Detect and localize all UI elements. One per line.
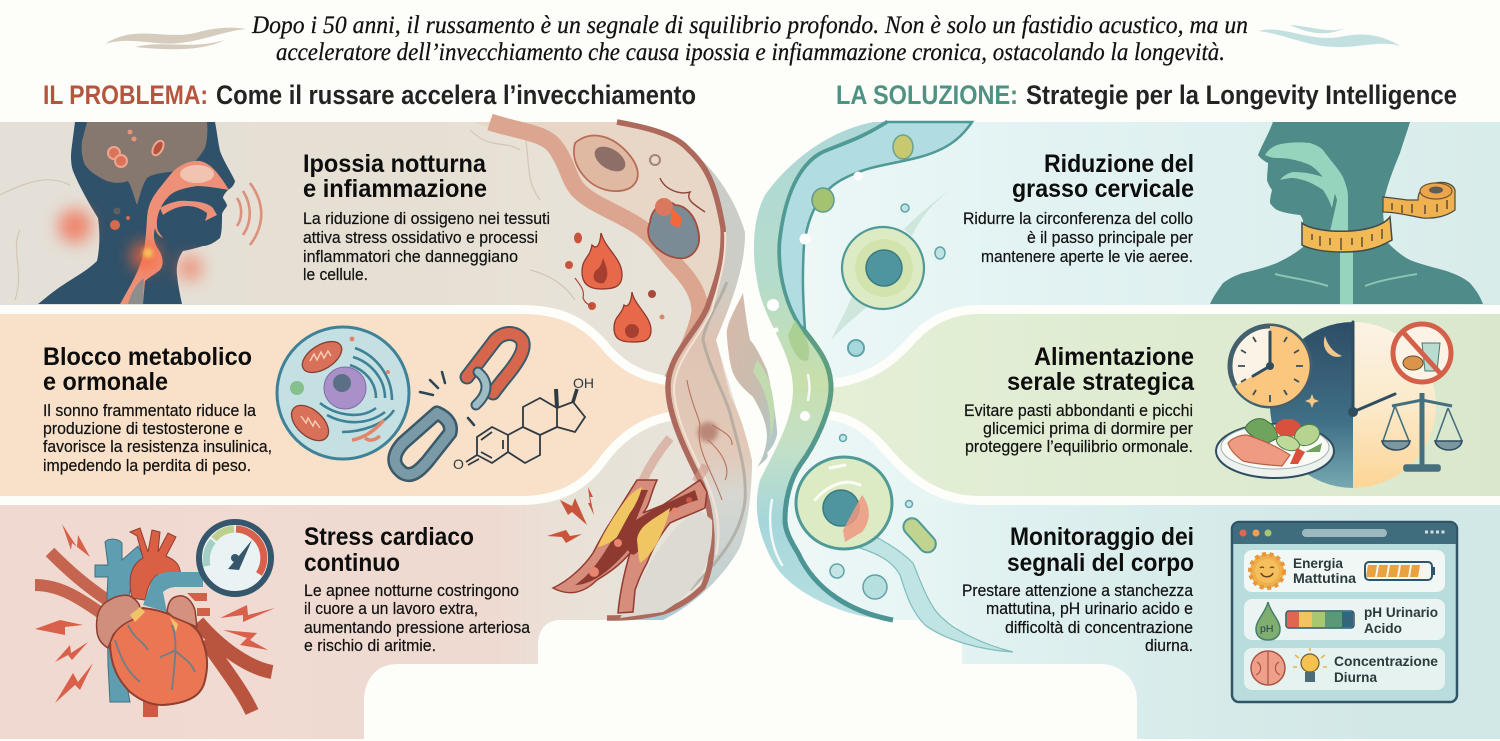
grey stripe inside rim xyxy=(690,282,745,590)
veins xyxy=(698,422,718,442)
heading: Stress cardiaco xyxy=(304,523,474,551)
panel: riduzione grasso cervicale xyxy=(754,122,1500,739)
flow: damaged tissue xyxy=(474,122,752,620)
panel: riduzione grasso cervicale: grasso cervicale xyxy=(1012,175,1194,203)
day half circle xyxy=(1353,322,1436,488)
row: energia mattutina: Energia xyxy=(1293,555,1343,571)
heading: il problema: IL PROBLEMA: xyxy=(43,80,208,110)
panel: ipossia notturna: attiva stress ossidativo e processi xyxy=(303,229,538,247)
panel: alimentazione serale: proteggere l’equilibrio ormonale. xyxy=(965,438,1193,456)
row: concentrazione diurna: Diurna xyxy=(1334,669,1377,685)
ornament: left swoosh xyxy=(105,28,246,49)
body text: La riduzione di ossigeno nei tessuti xyxy=(303,210,550,228)
panel: monitoraggio: difficoltà di concentrazione xyxy=(1005,619,1193,637)
brain xyxy=(82,122,207,205)
no fast food sign xyxy=(1393,324,1451,382)
airway xyxy=(120,161,229,304)
panel: riduzione grasso cervicale: è il passo principale per xyxy=(1027,229,1193,247)
shoulder lines xyxy=(1275,274,1417,286)
row: ph urinario: pH Urinario xyxy=(1364,604,1438,620)
panel: alimentazione serale: serale strategica xyxy=(1007,368,1195,396)
molecule labels: OH xyxy=(573,375,594,391)
panel: monitoraggio: mattutina, pH urinario acido e xyxy=(986,600,1193,618)
panel: stress cardiaco: aumentando pressione arteriosa xyxy=(304,619,531,637)
panel: ipossia notturna xyxy=(0,122,752,739)
panel: monitoraggio xyxy=(893,505,1500,739)
heading: Monitoraggio dei xyxy=(1010,523,1194,551)
particles in flow xyxy=(893,135,913,159)
panel: blocco metabolico: favorisce la resistenza insulinica, xyxy=(43,438,272,456)
flow: healthy xyxy=(754,122,1013,652)
flame 1 xyxy=(582,233,622,289)
panel: blocco metabolico: produzione di testosterone e xyxy=(43,420,243,438)
heading: la soluzione: LA SOLUZIONE: xyxy=(836,80,1018,110)
bubbles xyxy=(901,204,909,212)
panel: alimentazione serale: glicemici prima di dormire per xyxy=(983,420,1193,438)
dial hands xyxy=(1353,322,1395,412)
panel: ipossia notturna: e infiammazione xyxy=(303,175,487,203)
panel: blocco metabolico: impedendo la perdita di peso. xyxy=(43,457,251,475)
panel: blocco metabolico: e ormonale xyxy=(43,368,168,396)
vessel stripe highlight xyxy=(674,232,725,555)
title line 2: acceleratore dell’invecchiamento che causa ipossia e infiammazione cronica, ostacolando la longevità. xyxy=(276,39,1225,66)
dashboard xyxy=(1232,522,1457,702)
heading: il problema: Come il russare accelera l’invecchiamento xyxy=(216,80,696,110)
icon: pressure gauge xyxy=(199,522,271,594)
soft palate xyxy=(160,201,217,221)
panel: stress cardiaco: il cuore a un lavoro extra, xyxy=(304,600,478,618)
clock xyxy=(1230,326,1310,406)
plate of food xyxy=(1216,419,1334,478)
cracks xyxy=(0,130,575,300)
panel: monitoraggio: segnali del corpo xyxy=(1007,549,1194,577)
heading: Blocco metabolico xyxy=(43,343,252,371)
icon: cell xyxy=(277,327,409,459)
icon: testosterone molecule xyxy=(466,389,585,465)
flame 2 xyxy=(614,292,651,342)
row: concentrazione diurna: Concentrazione xyxy=(1334,653,1438,669)
heading: la soluzione: Strategie per la Longevity Intelligence xyxy=(1026,80,1457,110)
flow outer body xyxy=(754,122,893,620)
icon: narrowed arteries xyxy=(553,480,707,613)
upper tissue band xyxy=(474,122,723,387)
panel: blocco metabolico: O xyxy=(453,456,464,472)
window dots xyxy=(1240,530,1246,536)
night half circle xyxy=(1270,322,1353,488)
band inner edge xyxy=(490,122,700,380)
panel: ipossia notturna: inflammatori che danneggiano xyxy=(303,248,518,266)
heading: la soluzione xyxy=(836,80,1457,110)
row: ph urinario: pH xyxy=(1260,623,1273,635)
title line 1: Dopo i 50 anni, il russamento è un segnale di squilibrio profondo. Non è solo un fastidio acustico, ma un xyxy=(251,12,1248,39)
heading: Ipossia notturna xyxy=(303,150,487,178)
inflammation glows xyxy=(58,209,92,243)
row: energia mattutina: Mattutina xyxy=(1293,570,1356,586)
body text: Le apnee notturne costringono xyxy=(304,582,519,600)
panel: stress cardiaco: e rischio di aritmie. xyxy=(304,637,436,655)
body text: Il sonno frammentato riduce la xyxy=(43,402,257,420)
icon: neck profile xyxy=(1210,122,1483,304)
row: concentrazione diurna xyxy=(1244,648,1445,690)
airway xyxy=(1265,142,1348,232)
dark vessel stripe xyxy=(607,122,723,618)
bubbles lower xyxy=(830,564,844,578)
panel: stress cardiaco: continuo xyxy=(304,549,400,577)
decoration: central waves xyxy=(727,293,777,467)
title xyxy=(105,12,1400,66)
panel: stress cardiaco xyxy=(0,505,620,739)
row: energia mattutina xyxy=(1244,550,1445,592)
cell tail xyxy=(860,535,1013,652)
lightning marks near arteries xyxy=(547,487,594,543)
brain lesions xyxy=(108,147,120,159)
soft palate xyxy=(1280,172,1335,208)
healthy cell 2 xyxy=(796,457,892,549)
measuring tape xyxy=(1302,182,1455,252)
body text: Ridurre la circonferenza del collo xyxy=(963,210,1193,228)
flow upper blue band xyxy=(780,122,972,330)
artery fade upward xyxy=(642,438,706,482)
lightning marks around heart xyxy=(35,524,275,703)
scale xyxy=(1382,393,1462,471)
panel: riduzione grasso cervicale: mantenere aperte le vie aeree. xyxy=(981,248,1193,266)
embers xyxy=(574,232,582,244)
ornament: right swoosh xyxy=(1258,25,1400,47)
body text: Evitare pasti abbondanti e picchi xyxy=(964,402,1193,420)
healthy cell 1 xyxy=(831,180,965,340)
flow inner stroke xyxy=(780,122,893,620)
throat lower grey xyxy=(128,278,144,304)
moon and star xyxy=(1324,336,1342,357)
flow highlights xyxy=(770,375,810,565)
green drip xyxy=(788,320,809,361)
panel: blocco metabolico xyxy=(0,314,690,496)
icon: heart with vessels xyxy=(35,528,272,717)
icon: broken chain xyxy=(395,334,523,475)
capsule xyxy=(900,515,939,556)
lower airway xyxy=(1340,252,1353,304)
heading: Alimentazione xyxy=(1034,343,1194,371)
panel: alimentazione serale xyxy=(815,314,1500,496)
stone area xyxy=(620,510,712,618)
icon: head profile xyxy=(38,122,235,304)
stressed cell xyxy=(574,136,638,191)
sound waves xyxy=(237,183,261,245)
heading: il problema xyxy=(43,80,696,110)
nose pale highlight xyxy=(180,165,214,183)
body text: Prestare attenzione a stanchezza xyxy=(962,582,1194,600)
panel: ipossia notturna: le cellule. xyxy=(303,266,368,284)
necrotic cell xyxy=(648,202,699,258)
row: ph urinario: Acido xyxy=(1364,620,1402,636)
panel: monitoraggio: diurna. xyxy=(1145,637,1193,655)
heading: Riduzione del xyxy=(1044,150,1194,178)
outer rim xyxy=(607,122,752,620)
row: ph urinario xyxy=(1244,599,1445,640)
